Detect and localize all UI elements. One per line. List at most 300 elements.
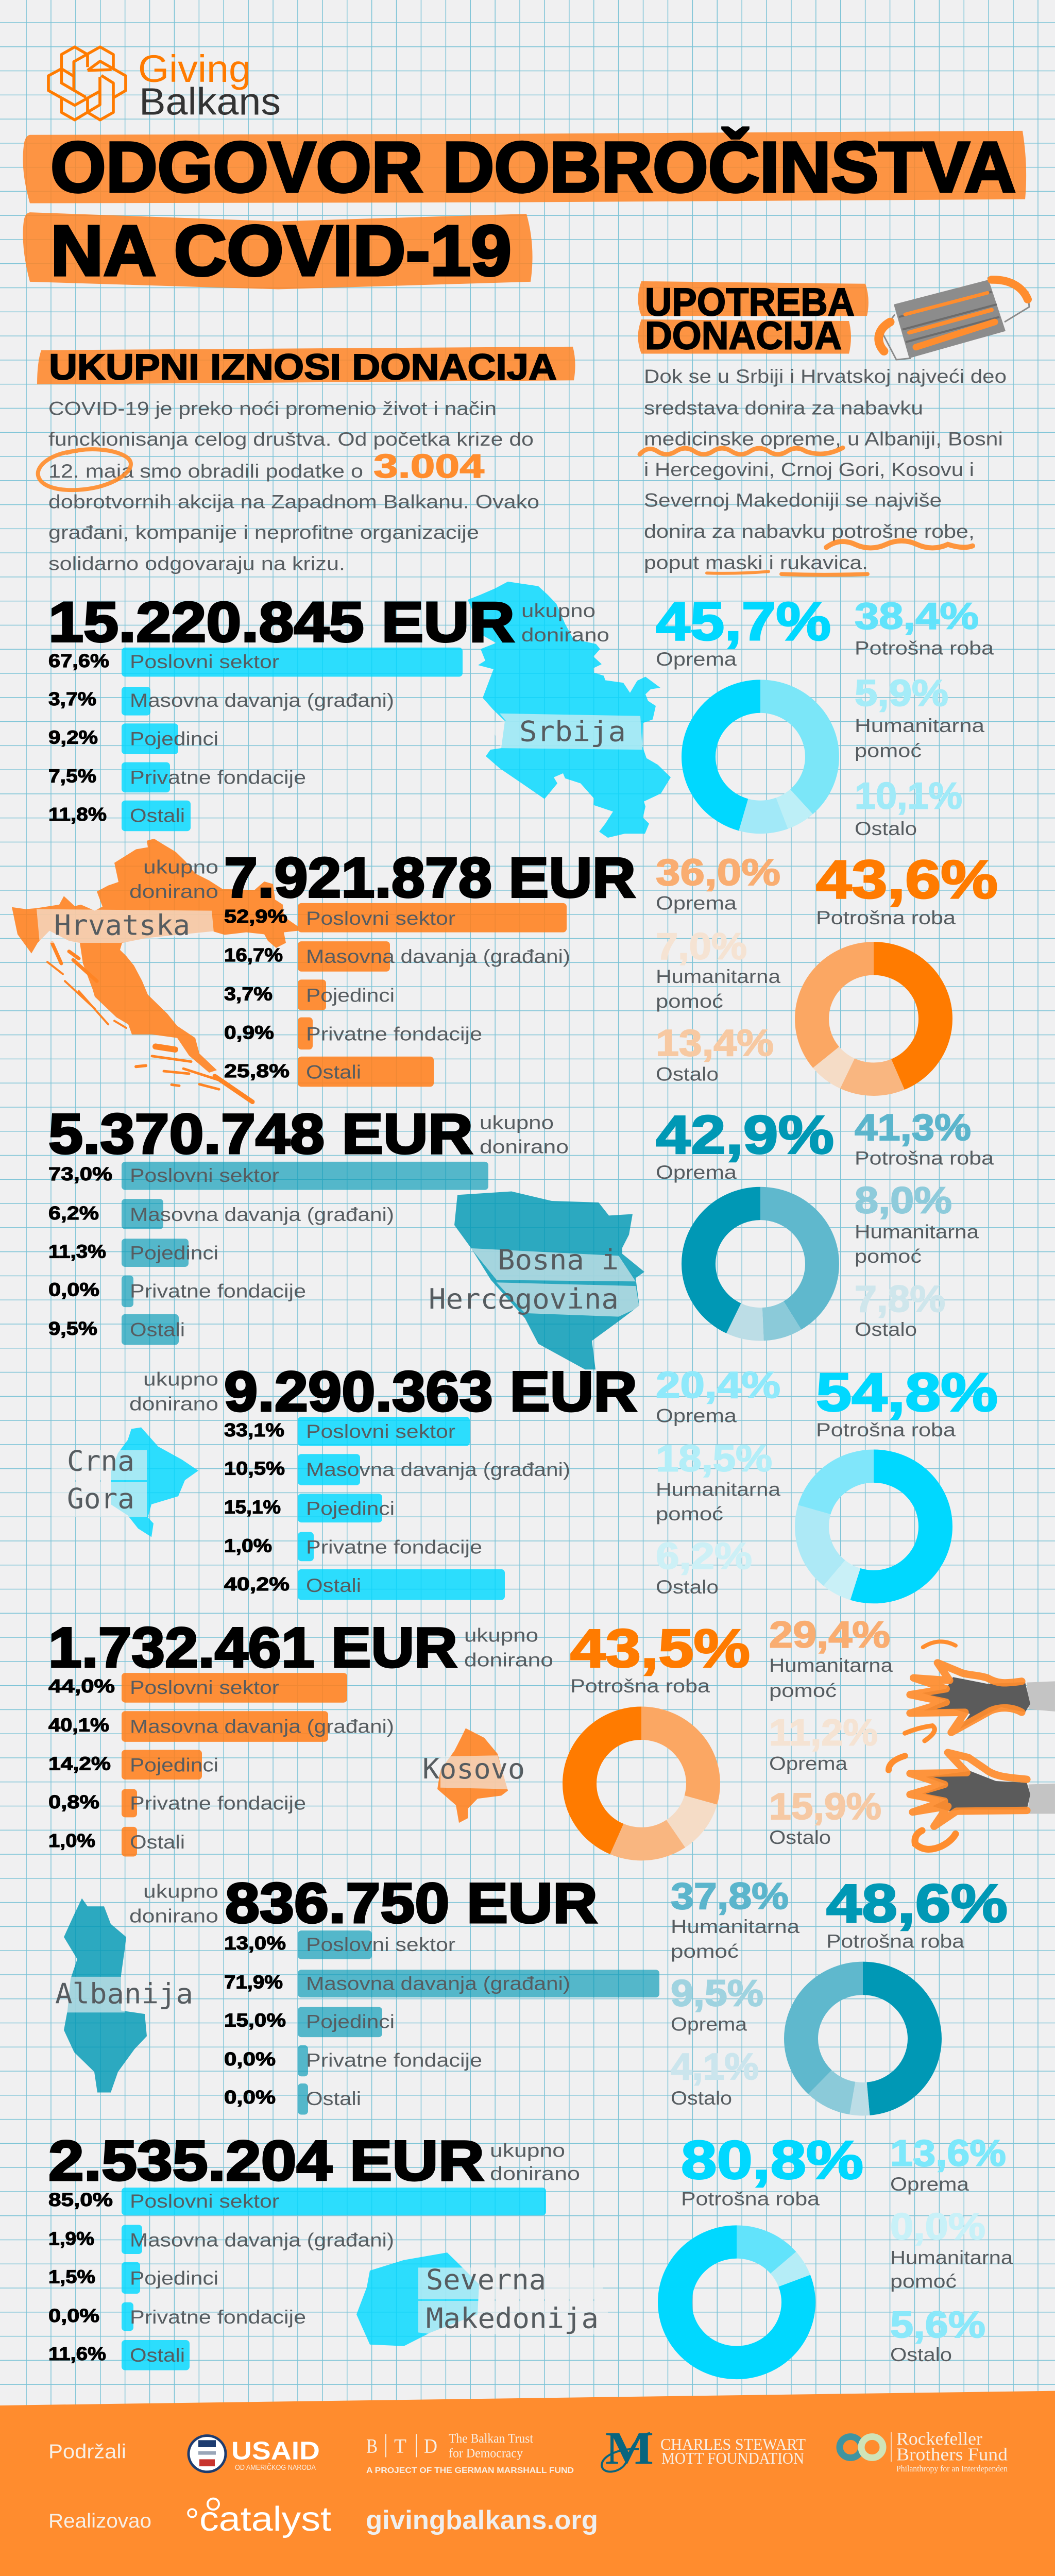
logo: Balkan Trust for Democracy: B — [366, 2435, 378, 2458]
stat: Oprema — [656, 1105, 834, 1183]
stat: Potrošna roba — [816, 850, 998, 928]
total amount: 7.921.878 EUR — [224, 846, 636, 909]
stat: Ostalo: 15,9% — [769, 1786, 881, 1827]
title highlight bar 2 — [23, 212, 533, 290]
bar: Privatne fondacije — [48, 1276, 306, 1307]
donut chart: use of donations — [812, 958, 935, 1079]
usage text: donira za nabavku potrošne robe, — [644, 520, 975, 542]
total caption: ukupno — [464, 1624, 538, 1646]
panel: Crna Gora — [52, 1360, 998, 1600]
hand-drawn circle — [38, 449, 131, 490]
logo: Rockefeller Brothers Fund: Brothers Fund — [896, 2444, 1008, 2464]
stat: Humanitarna pomoć: Humanitarna — [671, 1916, 799, 1937]
bar: Privatne fondacije: 0,9% — [224, 1022, 274, 1043]
total caption — [464, 1624, 553, 1670]
stat: Oprema: Oprema — [671, 2013, 747, 2035]
heading line 2: DONACIJA — [645, 314, 842, 358]
bar chart: donors — [224, 1930, 659, 2114]
total caption: ukupno — [521, 600, 595, 621]
stat: Potrošna roba: 43,6% — [816, 850, 998, 910]
stat: Potrošna roba: Potrošna roba — [855, 1147, 994, 1169]
total amount: 1.732.461 EUR — [48, 1617, 457, 1679]
bar: Masovna davanja: Masovna davanja (građani) — [130, 2229, 394, 2250]
bar: Masovna davanja — [48, 2225, 394, 2254]
stat: Ostalo: Ostalo — [656, 1576, 719, 1598]
footer background — [0, 2391, 1055, 2576]
intro text: dobrotvornih akcija na Zapadnom Balkanu. Ovako — [48, 491, 539, 512]
stat: Oprema — [671, 1973, 763, 2035]
heading: UKUPNI IZNOSI DONACIJA — [49, 347, 557, 387]
intro text: funckionisanja celog društva. Od početka krize do — [48, 429, 534, 450]
map label: Kosovo — [422, 1753, 525, 1786]
stat: Oprema: 36,0% — [656, 852, 780, 893]
logo: USAID: OD AMERIČKOG NARODA — [235, 2463, 316, 2472]
number highlight 3.004: 3.004 — [373, 447, 484, 485]
title — [23, 127, 1026, 291]
bar: Ostali — [48, 1827, 185, 1857]
map label band 1 — [52, 1450, 147, 1480]
map label: Srbija — [519, 716, 626, 748]
total amount: 5.370.748 EUR — [48, 1103, 473, 1165]
bar: Masovna davanja — [224, 941, 570, 972]
donut chart: use of donations — [580, 1723, 703, 1844]
total amount: 15.220.845 EUR — [48, 591, 515, 654]
stat: Ostalo — [769, 1786, 881, 1848]
logo: Balkan Trust for Democracy: A PROJECT OF THE GERMAN MARSHALL FUND — [366, 2466, 574, 2475]
total caption: donirano — [129, 881, 218, 902]
bar: Ostali: Ostali — [130, 2344, 185, 2366]
bar chart: donors — [48, 1673, 394, 1857]
bar: Masovna davanja: 71,9% — [224, 1972, 283, 1992]
bar: Poslovni sektor — [48, 1162, 488, 1190]
stat: Ostalo: 4,1% — [671, 2046, 759, 2088]
logo: USAID: USAID — [231, 2437, 320, 2465]
map label: Bosna i — [498, 1244, 619, 1277]
bar: Masovna davanja: Masovna davanja (građani) — [306, 1973, 570, 1994]
map label band — [67, 1977, 125, 2012]
logo: Charles Stewart Mott Foundation: MOTT FOUNDATION — [661, 2450, 804, 2467]
stat: Ostalo — [671, 2046, 759, 2109]
stat: Humanitarna pomoć: Humanitarna — [656, 1479, 780, 1500]
stat: Oprema: 20,4% — [656, 1365, 780, 1406]
bar: Ostali: 11,8% — [48, 804, 107, 825]
total caption: donirano — [129, 1905, 218, 1926]
map label — [67, 1445, 134, 1516]
stat: Humanitarna pomoć: pomoć — [656, 1503, 723, 1524]
logo word Giving: Giving — [138, 47, 251, 90]
stat: Oprema: 9,5% — [671, 1973, 763, 2014]
stat: Oprema: Oprema — [769, 1753, 847, 1774]
usage text: Dok se u Srbiji i Hrvatskoj najveći deo — [644, 366, 1007, 387]
bar: Ostali — [224, 1057, 434, 1087]
logo: Charles Stewart Mott Foundation — [602, 2422, 806, 2474]
bar: Pojedinci: Pojedinci — [130, 1242, 218, 1263]
bar: Privatne fondacije — [224, 1532, 482, 1561]
bar: Masovna davanja: 6,2% — [48, 1203, 99, 1224]
bar: Pojedinci: 14,2% — [48, 1753, 111, 1774]
stat: Potrošna roba: Potrošna roba — [681, 2188, 820, 2209]
bar: Pojedinci: 1,5% — [48, 2266, 95, 2287]
map label band 2 — [418, 2301, 608, 2334]
map label — [426, 2264, 599, 2335]
map label band 1 — [418, 2267, 603, 2299]
total caption: ukupno — [480, 1112, 554, 1133]
total caption — [129, 856, 218, 902]
bar: Ostali: Ostali — [306, 2088, 361, 2109]
map label band 1 — [471, 1248, 636, 1281]
bar: Masovna davanja: Masovna davanja (građani) — [130, 1204, 394, 1225]
intro text: 12. maja smo obradili podatke o — [48, 460, 363, 482]
bar: Poslovni sektor — [48, 648, 463, 676]
bar: Ostali — [48, 2340, 190, 2370]
stat: Humanitarna pomoć: pomoć — [855, 740, 922, 761]
title highlight bar 1 — [23, 131, 1026, 204]
panel: upotreba donacija — [638, 278, 1029, 575]
icon: surgical mask — [879, 278, 1029, 360]
stat: Potrošna roba: 80,8% — [681, 2130, 863, 2190]
stat: Humanitarna pomoć: 29,4% — [769, 1614, 890, 1655]
bar: Poslovni sektor: Poslovni sektor — [306, 907, 455, 929]
bar: Pojedinci: 3,7% — [224, 984, 273, 1004]
heading bar 2 — [638, 319, 851, 354]
bar: Privatne fondacije — [224, 1018, 482, 1049]
bar: Masovna davanja — [48, 1711, 394, 1742]
total caption — [521, 600, 609, 646]
stat: Potrošna roba: Potrošna roba — [855, 637, 994, 658]
bar: Masovna davanja: 3,7% — [48, 689, 96, 709]
map: Srbija — [468, 582, 671, 838]
usage text: poput maski i rukavica. — [644, 552, 868, 573]
bar: Masovna davanja: Masovna davanja (građani) — [306, 1459, 570, 1480]
total caption — [129, 1880, 218, 1926]
bar: Poslovni sektor: Poslovni sektor — [130, 1164, 279, 1186]
stat: Humanitarna pomoć — [769, 1614, 893, 1701]
bar: Ostali: 25,8% — [224, 1060, 290, 1081]
usage text: Severnoj Makedoniji se najviše — [644, 489, 942, 511]
bar: Poslovni sektor: Poslovni sektor — [130, 2191, 279, 2212]
stat: Ostalo — [656, 1023, 774, 1085]
map label band 2 — [52, 1482, 147, 1517]
heading bar 1 — [638, 281, 869, 316]
bar: Privatne fondacije: 0,0% — [224, 2048, 276, 2070]
stat: Oprema — [890, 2133, 1006, 2195]
stat: Oprema — [656, 591, 831, 670]
bar chart: donors — [48, 648, 463, 831]
stat: Humanitarna pomoć — [656, 1438, 780, 1524]
bar: Privatne fondacije — [48, 762, 306, 792]
panel: Kosovo — [48, 1614, 1055, 1857]
donut chart: use of donations — [812, 1466, 935, 1587]
stat: Oprema: Oprema — [656, 1405, 737, 1427]
stat: Ostalo — [855, 1279, 945, 1340]
panel: ukupni iznosi donacija — [37, 347, 575, 574]
bar chart: donors — [48, 2188, 546, 2370]
bar: Poslovni sektor — [48, 1673, 347, 1703]
bar chart: donors — [224, 903, 570, 1087]
stat: Oprema: 13,6% — [890, 2133, 1006, 2174]
bar: Privatne fondacije: 0,0% — [48, 1279, 99, 1300]
bar: Pojedinci — [224, 979, 395, 1010]
stat: Oprema — [656, 852, 780, 914]
map label: Hrvatska — [54, 909, 190, 942]
logo: Balkan Trust for Democracy — [366, 2431, 574, 2475]
bar: Privatne fondacije — [48, 2302, 306, 2331]
stat: Potrošna roba — [570, 1618, 750, 1697]
bar: Ostali: 1,0% — [48, 1830, 95, 1851]
intro text — [48, 398, 539, 574]
stat: Potrošna roba: 38,4% — [855, 596, 979, 637]
bar: Pojedinci: 15,0% — [224, 2010, 286, 2030]
producer label: Realizovao — [48, 2510, 151, 2532]
bar: Poslovni sektor: Poslovni sektor — [306, 1420, 455, 1442]
stat: Ostalo: 7,8% — [855, 1279, 945, 1320]
stat: Potrošna roba: 48,6% — [826, 1874, 1008, 1934]
stat: Oprema — [769, 1712, 878, 1774]
total caption — [129, 1368, 218, 1414]
bar: Poslovni sektor — [48, 2188, 546, 2215]
bar: Poslovni sektor: 13,0% — [224, 1933, 286, 1954]
bar: Pojedinci: Pojedinci — [306, 985, 395, 1006]
stat: Potrošna roba — [855, 1107, 994, 1169]
panel: Hrvatska — [12, 839, 998, 1102]
stat: Ostalo — [890, 2304, 985, 2365]
total caption: donirano — [521, 624, 609, 646]
bar: Pojedinci: Pojedinci — [130, 728, 218, 749]
stat: Humanitarna pomoć: pomoć — [656, 990, 723, 1012]
total caption: ukupno — [143, 856, 218, 877]
stat: Oprema: 45,7% — [656, 591, 831, 652]
bar: Pojedinci — [48, 723, 218, 754]
stat: Ostalo: 5,6% — [890, 2304, 985, 2346]
bar: Privatne fondacije: Privatne fondacije — [306, 2049, 482, 2071]
bar: Poslovni sektor: 52,9% — [224, 906, 287, 927]
icon: hexagon logo mark — [48, 47, 126, 120]
bar: Ostali: 9,5% — [48, 1318, 97, 1339]
stat: Oprema: 42,9% — [656, 1105, 834, 1165]
stat: Humanitarna pomoć: 8,0% — [855, 1180, 952, 1221]
stat: Ostalo — [656, 1536, 752, 1598]
bar: Pojedinci: 11,3% — [48, 1241, 106, 1262]
logo: Giving Balkans — [48, 47, 281, 123]
bar: Ostali — [224, 1569, 505, 1600]
bar: Masovna davanja: Masovna davanja (građani) — [306, 946, 570, 967]
usage text: i Hercegovini, Crnoj Gori, Kosovu i — [644, 459, 974, 480]
bar: Pojedinci: 9,2% — [48, 727, 98, 748]
stat: Humanitarna pomoć: Humanitarna — [855, 715, 984, 736]
total amount: 836.750 EUR — [225, 1872, 598, 1935]
website: givingbalkans.org — [366, 2506, 598, 2535]
bar: Poslovni sektor: 33,1% — [224, 1419, 284, 1440]
icon: gloved hands — [889, 1641, 1055, 1849]
stat: Oprema: Oprema — [890, 2173, 969, 2195]
logo: Balkan Trust for Democracy: D — [424, 2435, 437, 2458]
stat: Humanitarna pomoć: Humanitarna — [855, 1221, 979, 1242]
stat: Humanitarna pomoć: 5,9% — [855, 673, 948, 714]
stat: Potrošna roba: 54,8% — [816, 1362, 998, 1422]
stat: Ostalo: Ostalo — [855, 1318, 917, 1340]
stat: Potrošna roba: Potrošna roba — [570, 1675, 710, 1697]
stat: Ostalo: Ostalo — [890, 2344, 952, 2365]
supporters label: Podržali — [48, 2441, 126, 2463]
bar: Privatne fondacije: 0,8% — [48, 1791, 99, 1812]
total caption — [480, 1112, 569, 1157]
bar: Ostali: Ostali — [130, 1319, 185, 1341]
stat: Potrošna roba — [826, 1874, 1008, 1952]
stat: Humanitarna pomoć: pomoć — [890, 2270, 957, 2292]
map label band 2 — [497, 1282, 639, 1317]
map label band — [440, 1755, 508, 1789]
bar: Pojedinci — [48, 1750, 218, 1780]
bar: Ostali — [224, 2083, 361, 2114]
map label: Gora — [67, 1483, 134, 1516]
total caption: ukupno — [143, 1368, 218, 1389]
donut chart: use of donations — [699, 697, 822, 817]
bar chart: donors — [224, 1417, 570, 1600]
stat: Humanitarna pomoć: Humanitarna — [769, 1655, 893, 1676]
map: Albanija — [64, 1899, 147, 2093]
bar: Privatne fondacije: Privatne fondacije — [130, 1792, 306, 1814]
stat: Humanitarna pomoć: Humanitarna — [656, 966, 780, 987]
bar: Masovna davanja: 16,7% — [224, 945, 283, 965]
bar: Pojedinci — [48, 1239, 218, 1267]
stat: Potrošna roba: 43,5% — [570, 1618, 750, 1679]
map: Severna Makedonija — [356, 2252, 479, 2346]
usage text — [644, 366, 1007, 573]
bar: Privatne fondacije: Privatne fondacije — [130, 767, 306, 788]
bar: Ostali: 40,2% — [224, 1573, 290, 1595]
bar: Privatne fondacije — [224, 2045, 482, 2076]
bar: Masovna davanja — [224, 1970, 659, 1997]
map: Crna Gora — [111, 1428, 198, 1537]
title line 2: NA COVID-19 — [50, 211, 512, 291]
stat: Humanitarna pomoć: pomoć — [855, 1246, 922, 1267]
bar: Poslovni sektor: 44,0% — [48, 1676, 115, 1697]
total caption — [490, 2140, 580, 2184]
logo: Rockefeller Brothers Fund: Philanthropy for an Interdependen — [896, 2464, 1008, 2473]
stat: Ostalo: Ostalo — [855, 818, 917, 839]
bar: Privatne fondacije: 7,5% — [48, 766, 96, 786]
bar: Ostali: Ostali — [130, 805, 185, 826]
stat: Humanitarna pomoć — [855, 1180, 979, 1267]
map label — [429, 1244, 619, 1316]
map label: Severna — [426, 2264, 546, 2296]
logo: Rockefeller Brothers Fund: Rockefeller — [896, 2428, 982, 2449]
bar chart: donors — [48, 1162, 488, 1345]
bar: Poslovni sektor: Poslovni sektor — [130, 1676, 279, 1698]
stat: Humanitarna pomoć: 18,5% — [656, 1438, 772, 1479]
bar: Privatne fondacije: Privatne fondacije — [130, 2306, 306, 2328]
intro text: solidarno odgovaraju na krizu. — [48, 553, 345, 574]
logo: USAID — [189, 2436, 320, 2472]
bar: Pojedinci: Pojedinci — [130, 1754, 218, 1775]
bar: Masovna davanja — [48, 687, 394, 716]
bar: Poslovni sektor — [224, 1417, 470, 1446]
stat: Humanitarna pomoć: 0,0% — [890, 2206, 985, 2247]
stat: Potrošna roba: Potrošna roba — [816, 1419, 956, 1440]
bar: Masovna davanja — [224, 1454, 570, 1485]
bar: Pojedinci: Pojedinci — [306, 2011, 395, 2032]
bar: Poslovni sektor: 67,6% — [48, 650, 109, 671]
usage text: sredstava donira za nabavku — [644, 397, 923, 419]
map label: Crna — [67, 1445, 134, 1478]
logo: Balkan Trust for Democracy: T — [394, 2435, 406, 2458]
bar: Pojedinci — [48, 2262, 218, 2294]
logo: Rockefeller Brothers Fund — [840, 2428, 1008, 2473]
donut chart: use of donations — [699, 1204, 822, 1324]
usage text: medicinske opreme, u Albaniji, Bosni — [644, 428, 1003, 449]
panel: Bosna i Hercegovina — [48, 1103, 994, 1369]
logo word Balkans: Balkans — [139, 80, 281, 123]
bar: Privatne fondacije: Privatne fondacije — [130, 1280, 306, 1301]
stat: Ostalo: Ostalo — [656, 1063, 719, 1085]
bar: Poslovni sektor: Poslovni sektor — [130, 651, 279, 672]
stat: Potrošna roba: 41,3% — [855, 1107, 971, 1148]
logo: catalyst: catalyst — [199, 2500, 331, 2538]
stat: Ostalo: Ostalo — [769, 1827, 831, 1848]
donut chart: use of donations — [675, 2242, 798, 2363]
panel: Severna Makedonija — [48, 2130, 1013, 2370]
total caption: donirano — [129, 1393, 218, 1414]
stat: Potrošna roba — [816, 1362, 998, 1440]
total caption: donirano — [480, 1136, 569, 1157]
stat: Humanitarna pomoć — [671, 1876, 799, 1962]
map: Bosna i Hercegovina — [454, 1191, 644, 1369]
stat: Oprema: Oprema — [656, 892, 737, 914]
map: Hrvatska — [12, 839, 298, 1073]
map: Kosovo — [437, 1728, 508, 1823]
map label: Hercegovina — [429, 1283, 619, 1316]
heading bar — [37, 347, 575, 384]
stat: Ostalo: 6,2% — [656, 1536, 752, 1577]
stat: Humanitarna pomoć: pomoć — [769, 1680, 837, 1701]
stat: Humanitarna pomoć: pomoć — [671, 1940, 739, 1962]
map label: Albanija — [55, 1978, 193, 2011]
stat: Potrošna roba: Potrošna roba — [816, 907, 956, 928]
bar: Privatne fondacije — [48, 1789, 306, 1817]
bar: Ostali — [48, 1314, 185, 1345]
bar: Privatne fondacije: 1,0% — [224, 1535, 272, 1556]
stat: Ostalo: 10,1% — [855, 775, 962, 817]
logo: Balkan Trust for Democracy: for Democracy — [449, 2446, 523, 2460]
bar: Ostali: 11,6% — [48, 2343, 106, 2364]
map islands — [47, 943, 252, 1102]
total amount: 9.290.363 EUR — [224, 1360, 637, 1423]
stat: Humanitarna pomoć — [890, 2206, 1013, 2292]
map label: Makedonija — [426, 2302, 599, 2335]
stat: Humanitarna pomoć — [656, 926, 780, 1012]
total caption: ukupno — [490, 2140, 565, 2161]
bar: Pojedinci: Pojedinci — [130, 2267, 218, 2289]
bar: Ostali: Ostali — [130, 1831, 185, 1853]
stat: Potrošna roba — [855, 596, 994, 658]
stat: Oprema: 11,2% — [769, 1712, 878, 1754]
stat: Oprema: Oprema — [656, 1161, 737, 1183]
bar: Privatne fondacije: 0,0% — [48, 2305, 99, 2326]
bar: Poslovni sektor: 73,0% — [48, 1163, 112, 1184]
bar: Ostali: Ostali — [306, 1061, 361, 1083]
intro text: građani, kompanije i neprofitne organizacije — [48, 521, 479, 543]
bar: Poslovni sektor — [224, 1930, 455, 1959]
bar: Ostali — [48, 801, 191, 831]
panel: Srbija — [48, 582, 994, 839]
title line 1: ODGOVOR DOBROČINSTVA — [50, 127, 1016, 207]
heading line 1: UPOTREBA — [645, 280, 855, 324]
logo: Charles Stewart Mott Foundation: M — [605, 2422, 654, 2474]
bar: Pojedinci: 15,1% — [224, 1497, 281, 1517]
underline squiggles — [640, 448, 973, 575]
stat: Ostalo: 13,4% — [656, 1023, 774, 1064]
total caption: donirano — [490, 2163, 580, 2184]
